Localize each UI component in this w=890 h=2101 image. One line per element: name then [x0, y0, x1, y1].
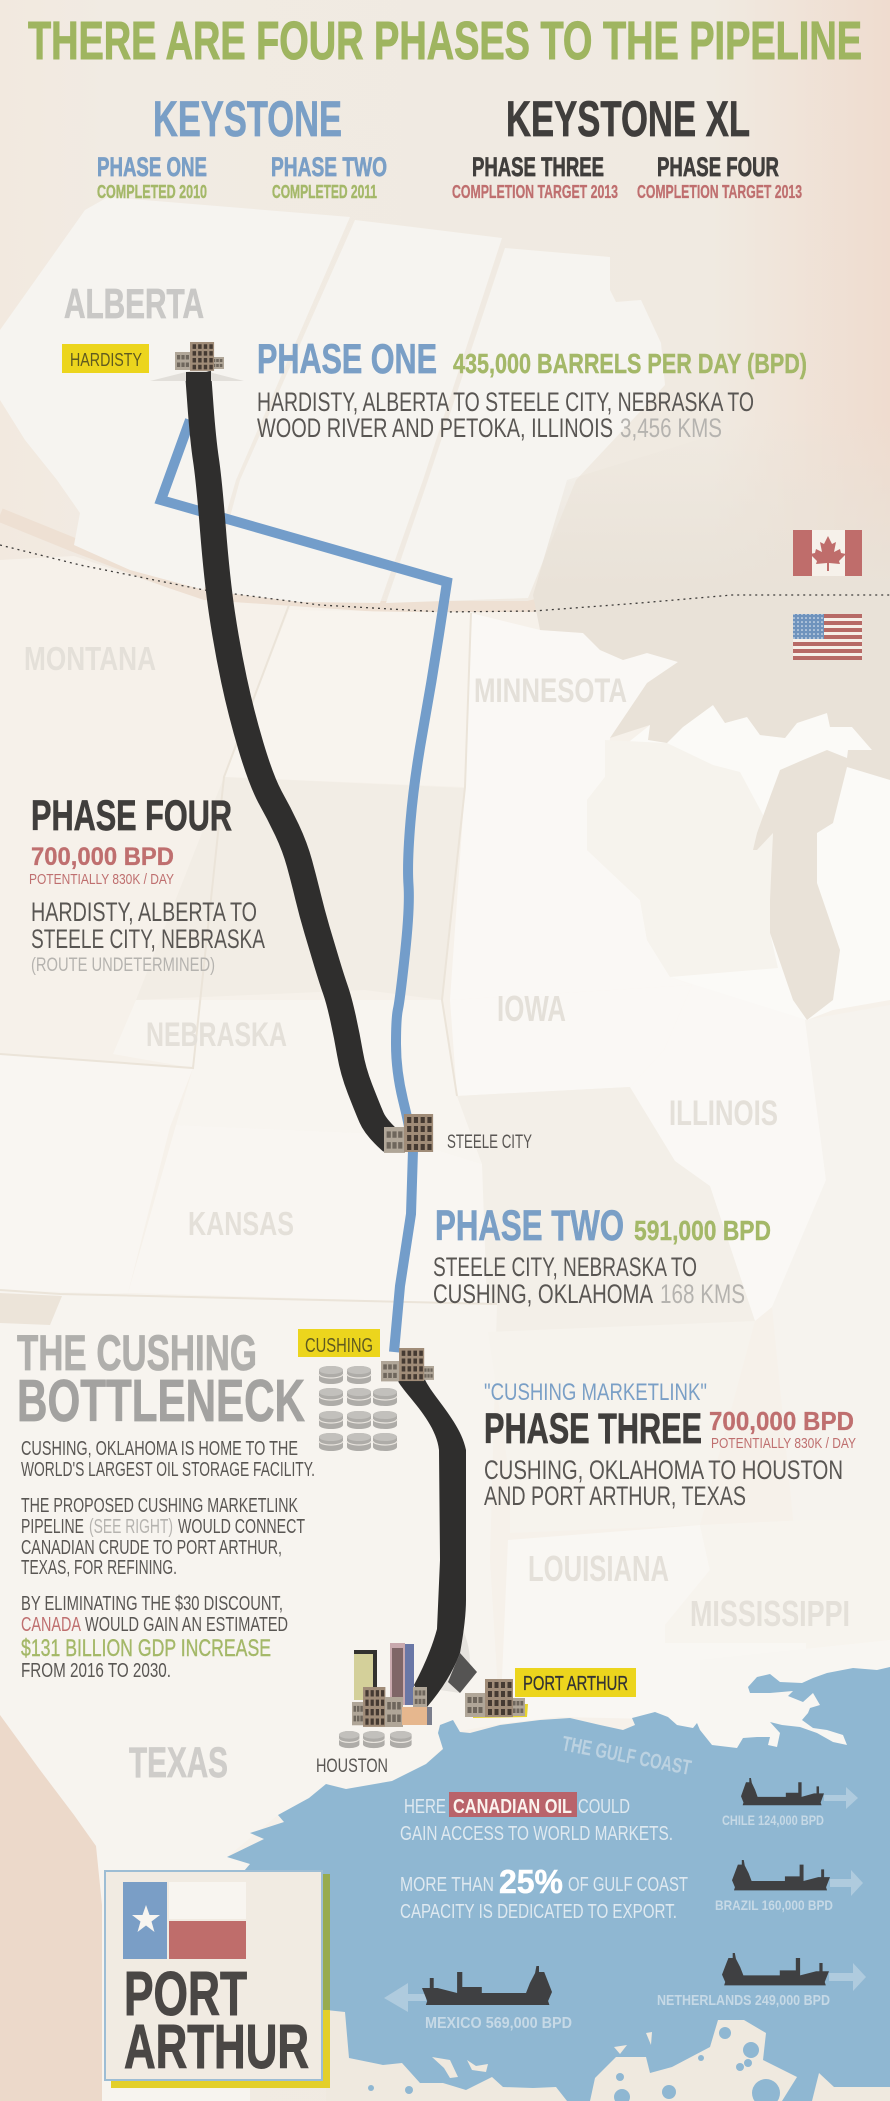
text block: cushing bottleneck body: (SEE RIGHT)	[89, 1516, 173, 1538]
header: keystone xl	[452, 91, 802, 202]
text block: phase one	[257, 335, 807, 443]
ship: mexico: MEXICO 569,000 BPD	[425, 2015, 572, 2032]
text block: phase three: AND PORT ARTHUR, TEXAS	[484, 1481, 746, 1511]
text block: cushing bottleneck body: WOULD CONNECT	[178, 1516, 305, 1538]
building: steele city	[384, 1114, 433, 1153]
map: ontario and great lakes	[533, 380, 890, 1020]
heading: the cushing bottleneck: BOTTLENECK	[17, 1368, 305, 1434]
pipeline: keystone blue route	[161, 420, 447, 1352]
header: keystone xl: PHASE FOUR	[657, 152, 779, 182]
state labels: IOWA	[497, 988, 566, 1029]
text block: cushing bottleneck body: TEXAS, FOR REFINING.	[21, 1557, 177, 1579]
state labels	[24, 280, 850, 1787]
label: cushing: CUSHING	[305, 1335, 373, 1357]
barrels: cushing storage	[319, 1366, 397, 1451]
text block: phase four	[29, 792, 265, 976]
label: cushing	[298, 1329, 380, 1357]
state labels: TEXAS	[129, 1739, 228, 1787]
text block: phase two: CUSHING, OKLAHOMA	[433, 1279, 653, 1309]
text block: phase three: 700,000 BPD	[709, 1406, 854, 1436]
text block: phase two	[433, 1202, 771, 1309]
text block: cushing bottleneck body: CANADIAN CRUDE TO PORT ARTHUR,	[21, 1537, 282, 1559]
label: hardisty: HARDISTY	[70, 350, 142, 370]
header: keystone: PHASE ONE	[97, 152, 207, 182]
pipeline: keystone xl black route south	[397, 1375, 477, 1707]
map: canada provinces	[0, 197, 665, 608]
label: houston: HOUSTON	[316, 1756, 388, 1777]
text block: export capacity	[400, 1863, 688, 1923]
map: mexico land	[0, 1715, 102, 2101]
header: keystone: KEYSTONE	[153, 91, 342, 147]
state labels: LOUISIANA	[528, 1548, 669, 1589]
text block: cushing bottleneck body: FROM 2016 TO 2030.	[21, 1660, 171, 1682]
ship: chile	[722, 1778, 858, 1828]
text block: phase four: 700,000 BPD	[31, 843, 174, 871]
building: houston skyline	[352, 1643, 432, 1727]
building: port arthur	[465, 1679, 528, 1718]
icon: texas flag	[123, 1882, 246, 1959]
ship: netherlands	[657, 1953, 866, 2009]
text block: cushing bottleneck body: PIPELINE	[21, 1516, 84, 1538]
header: keystone: PHASE TWO	[271, 152, 387, 182]
text block: phase two: STEELE CITY, NEBRASKA TO	[433, 1252, 697, 1282]
text block: phase three: "CUSHING MARKETLINK"	[484, 1379, 707, 1406]
heading: the cushing bottleneck	[17, 1325, 305, 1434]
text block: phase four: STEELE CITY, NEBRASKA	[31, 924, 265, 954]
header: keystone xl: PHASE THREE	[472, 152, 604, 182]
header: keystone xl: COMPLETION TARGET 2013	[452, 182, 618, 202]
flag: united states	[793, 614, 862, 660]
card: port arthur: PORT	[124, 1960, 247, 2029]
gulf of mexico	[227, 1667, 890, 2101]
text block: export capacity: MORE THAN	[400, 1874, 494, 1896]
state labels: ALBERTA	[64, 280, 204, 327]
text block: phase three: POTENTIALLY 830K / DAY	[711, 1435, 856, 1452]
text block: export capacity: CAPACITY IS DEDICATED TO EXPORT.	[400, 1901, 677, 1923]
text block: export capacity: OF GULF COAST	[568, 1874, 688, 1896]
card: port arthur: ARTHUR	[124, 2013, 309, 2082]
label: port arthur: PORT ARTHUR	[523, 1673, 628, 1695]
header: keystone: COMPLETED 2010	[97, 182, 207, 202]
text block: cushing bottleneck body: CUSHING, OKLAHOMA IS HOME TO THE	[21, 1438, 298, 1460]
ship: mexico	[384, 1966, 572, 2032]
label: hardisty	[62, 344, 149, 373]
text block: cushing bottleneck body: BY ELIMINATING THE $30 DISCOUNT,	[21, 1593, 283, 1615]
label: port arthur	[515, 1668, 636, 1697]
text block: phase four: HARDISTY, ALBERTA TO	[31, 897, 257, 927]
label: steele city: STEELE CITY	[447, 1132, 532, 1153]
header: keystone	[97, 91, 387, 202]
map: united states states	[0, 556, 890, 2101]
building: hardisty	[150, 342, 244, 384]
state labels: MINNESOTA	[474, 672, 627, 710]
text block: phase three: PHASE THREE	[484, 1405, 702, 1453]
state labels: ILLINOIS	[669, 1094, 778, 1133]
text block: phase two: 591,000 BPD	[634, 1215, 771, 1246]
text block: phase four: POTENTIALLY 830K / DAY	[29, 871, 174, 888]
state labels: MONTANA	[24, 640, 156, 677]
text block: cushing bottleneck body: WOULD GAIN AN ESTIMATED	[85, 1614, 288, 1636]
text block: phase four: (ROUTE UNDETERMINED)	[31, 955, 215, 976]
text block: canadian oil: GAIN ACCESS TO WORLD MARKETS.	[400, 1823, 673, 1845]
text block: cushing bottleneck body: CANADA	[21, 1614, 81, 1636]
label: the gulf coast: THE GULF COAST	[560, 1732, 693, 1780]
ship: chile: CHILE 124,000 BPD	[722, 1812, 824, 1828]
text block: cushing bottleneck body: THE PROPOSED CUSHING MARKETLINK	[21, 1495, 298, 1517]
ship: brazil	[715, 1860, 863, 1913]
heading: the cushing bottleneck: THE CUSHING	[17, 1325, 257, 1381]
flag: canada	[793, 530, 862, 576]
text block: phase two: PHASE TWO	[435, 1202, 624, 1250]
state labels: NEBRASKA	[146, 1016, 287, 1054]
text block: phase one: 3,456 KMS	[620, 413, 722, 443]
text block: phase one: WOOD RIVER AND PETOKA, ILLINOIS	[257, 413, 613, 443]
text block: canadian oil: COULD	[578, 1796, 630, 1818]
text block: canadian oil	[400, 1792, 673, 1845]
card: port arthur	[105, 1871, 330, 2088]
text block: export capacity: 25%	[499, 1863, 563, 1900]
ship: brazil: BRAZIL 160,000 BPD	[715, 1897, 833, 1913]
building: cushing	[381, 1348, 434, 1381]
header: keystone xl: COMPLETION TARGET 2013	[637, 182, 802, 202]
text block: canadian oil: HERE	[404, 1796, 446, 1818]
pipeline: keystone xl black route north	[198, 372, 392, 1142]
text block: cushing bottleneck body: $131 BILLION GDP INCREASE	[21, 1635, 271, 1662]
text block: phase three	[484, 1379, 856, 1511]
text block: cushing bottleneck body	[21, 1438, 315, 1682]
barrels: houston	[339, 1731, 412, 1748]
text block: phase two: 168 KMS	[660, 1279, 745, 1309]
header: keystone: COMPLETED 2011	[272, 182, 377, 202]
text block: phase four: PHASE FOUR	[31, 792, 232, 840]
canada us border	[0, 545, 890, 612]
text block: cushing bottleneck body: WORLD'S LARGEST OIL STORAGE FACILITY.	[21, 1459, 315, 1481]
header: keystone xl: KEYSTONE XL	[506, 91, 750, 147]
text block: canadian oil: CANADIAN OIL	[453, 1796, 572, 1818]
state labels: KANSAS	[188, 1205, 294, 1242]
ship: netherlands: NETHERLANDS 249,000 BPD	[657, 1992, 830, 2009]
map: michigan and wisconsin	[587, 705, 890, 1020]
text block: phase one: PHASE ONE	[257, 335, 437, 382]
